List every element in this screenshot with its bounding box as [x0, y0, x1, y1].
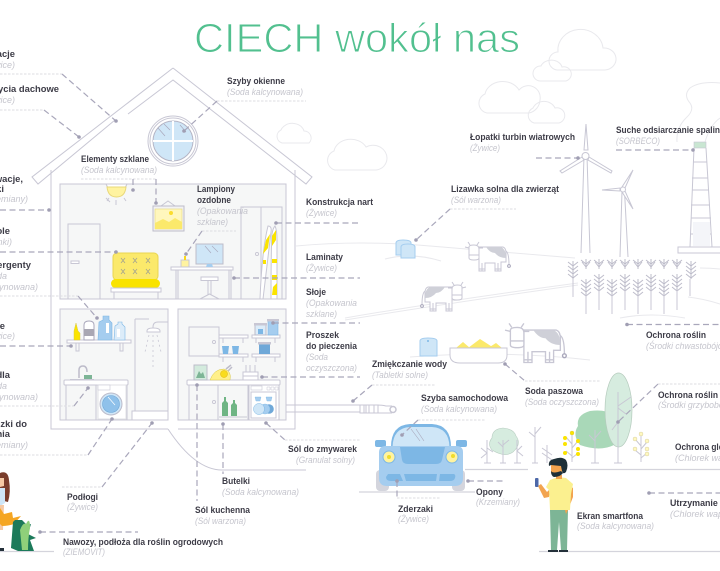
label: detergenty [0, 259, 38, 292]
title: CIECH wokół nas [194, 15, 520, 61]
label: sól do zmywarek: Sól do zmywarek [288, 443, 358, 454]
label: suche odsiarczanie: (SORBECO) [616, 136, 660, 146]
label: renowacje [0, 173, 28, 204]
label: nawozy [63, 536, 223, 557]
round window [148, 116, 198, 166]
label: słoje: szklane) [306, 309, 337, 319]
label: elementy szklane: (Soda kalcynowana) [81, 165, 157, 175]
label: szyba samochodowa: Szyba samochodowa [421, 392, 509, 403]
label: sól kuchenna: (Sól warzona) [195, 516, 246, 526]
label: ekran smartfona: Ekran smartfona [577, 510, 644, 521]
label: lizawka solna [451, 183, 559, 205]
label: lampiony ozdobne: ozdobne [197, 194, 231, 205]
car [375, 424, 467, 491]
label: ochrona roślin grzybobójcze [658, 389, 720, 410]
roof [32, 68, 312, 184]
sofa [111, 253, 161, 299]
label: słoje [306, 286, 357, 319]
label: ochrona gleby [675, 441, 720, 463]
house [32, 68, 312, 470]
label: soda paszowa: Soda paszowa [525, 385, 584, 396]
flowers [563, 431, 649, 462]
label: proszek do pieczenia: Proszek [306, 329, 340, 340]
label: sól do zmywarek [288, 443, 358, 465]
label: podłogi [67, 491, 98, 512]
road and ground lines [0, 470, 720, 552]
label: sól do zmywarek: (Granulat solny) [296, 455, 355, 465]
label: szyba samochodowa [421, 392, 509, 414]
label: podłogi: (Żywice) [67, 502, 98, 512]
upper room [60, 184, 286, 299]
person with smartphone [535, 458, 573, 552]
lower left room [60, 309, 168, 420]
label: kleje [0, 320, 15, 341]
label: szyby okienne: Szyby okienne [227, 75, 285, 86]
label: soda paszowa: (Soda oczyszczona) [525, 397, 599, 407]
cow middle [421, 282, 466, 311]
label: proszek do pieczenia: oczyszczona) [306, 363, 357, 373]
woman watering plants [0, 472, 36, 551]
label: szyby okienne [227, 75, 303, 97]
door [68, 224, 100, 299]
lower right room [178, 309, 286, 420]
label: szkło dla [0, 369, 38, 402]
label: łopatki turbin [470, 131, 575, 153]
sink and washing machine [64, 366, 128, 420]
label: lizawka solna: Lizawka solna dla zwierząt [451, 183, 559, 194]
label: butelki [222, 475, 299, 497]
label: laminaty: Laminaty [306, 251, 344, 262]
background hills [296, 243, 720, 360]
label: szyba samochodowa: (Soda kalcynowana) [421, 404, 497, 414]
label: zderzaki [398, 503, 433, 524]
label: instalacje [0, 48, 15, 70]
label: butelki: (Soda kalcynowana) [222, 487, 299, 497]
background clouds [277, 29, 616, 170]
label: laminaty [306, 251, 344, 273]
label: konstrukcja nart [306, 196, 373, 218]
label: ekran smartfona: (Soda kalcynowana) [577, 521, 654, 531]
wheat field [568, 259, 696, 314]
wind turbine small [602, 170, 633, 257]
label: sól kuchenna: Sól kuchenna [195, 504, 251, 515]
label: opony: (Krzemiany) [476, 497, 520, 507]
label: proszek do pieczenia [306, 329, 358, 373]
label: lizawka solna: (Sól warzona) [451, 195, 501, 205]
label: lampiony ozdobne: (Opakowania [197, 206, 248, 216]
label: opony [476, 486, 520, 507]
label: pokrycia dachowe [0, 83, 59, 105]
label: konsole [0, 225, 12, 247]
cow large [505, 323, 566, 362]
trees small [481, 427, 552, 463]
label: szyby okienne: (Soda kalcynowana) [227, 87, 303, 97]
label: lampiony ozdobne: szklane) [197, 217, 228, 227]
label: lampiony ozdobne: Lampiony [197, 183, 236, 194]
label: zmiękczanie wody: (Tabletki solne) [372, 370, 428, 380]
feed bowl [450, 339, 507, 363]
label: konstrukcja nart: (Żywice) [306, 208, 337, 218]
label: ekran smartfona [577, 510, 654, 531]
wind turbine large [560, 124, 612, 253]
label: nawozy: Nawozy, podłoża dla roślin ogrodowych [63, 536, 223, 547]
shower [132, 319, 168, 420]
wardrobe with skis [241, 207, 282, 299]
label: proszki do prania [0, 418, 28, 450]
label: elementy szklane: Elementy szklane [81, 153, 149, 164]
label: laminaty: (Żywice) [306, 263, 337, 273]
label: lampiony ozdobne [197, 183, 248, 227]
label: nawozy: (ZIEMOVIT) [63, 547, 105, 557]
label: opony: Opony [476, 486, 504, 497]
label: proszek do pieczenia: (Soda [306, 352, 328, 362]
label: soda paszowa [525, 385, 599, 407]
label: proszek do pieczenia: do pieczenia [306, 340, 358, 351]
cow top [465, 242, 510, 271]
drain pipe [286, 405, 396, 413]
label: butelki: Butelki [222, 475, 250, 486]
water softener block [420, 338, 437, 356]
label: zderzaki: Zderzaki [398, 503, 433, 514]
walls [51, 170, 295, 429]
kitchen cabinet, shelves and jars [189, 319, 280, 362]
label: słoje: Słoje [306, 286, 326, 297]
desk with monitor, lantern and stool [171, 244, 233, 299]
bathroom shelf with bottles [67, 316, 131, 351]
label: ochrona roślin chwastobójcze [646, 329, 720, 351]
label: suche odsiarczanie [616, 124, 720, 146]
dishwasher [249, 385, 279, 420]
label: łopatki turbin: Łopatki turbin wiatrowych [470, 131, 575, 142]
ceiling lamp [106, 184, 127, 205]
label: łopatki turbin: (Żywice) [470, 143, 500, 153]
label: elementy szklane [81, 153, 157, 175]
label: słoje: (Opakowania [306, 298, 357, 308]
trees large [575, 373, 632, 463]
label: zmiękczanie wody: Zmiękczanie wody [372, 358, 448, 369]
kitchen counter with food [187, 365, 280, 420]
picture [153, 201, 184, 231]
label: ochrona roślin chwastobójcze: Ochrona roślin [646, 329, 706, 340]
label: konstrukcja nart: Konstrukcja nart [306, 196, 373, 207]
label: utrzymanie dróg [670, 497, 720, 519]
label: podłogi: Podłogi [67, 491, 98, 502]
salt licks [396, 240, 415, 258]
label: zmiękczanie wody [372, 358, 448, 380]
chimney with smoke [677, 83, 720, 253]
label: sól kuchenna [195, 504, 251, 526]
label: zderzaki: (Żywice) [398, 514, 429, 524]
